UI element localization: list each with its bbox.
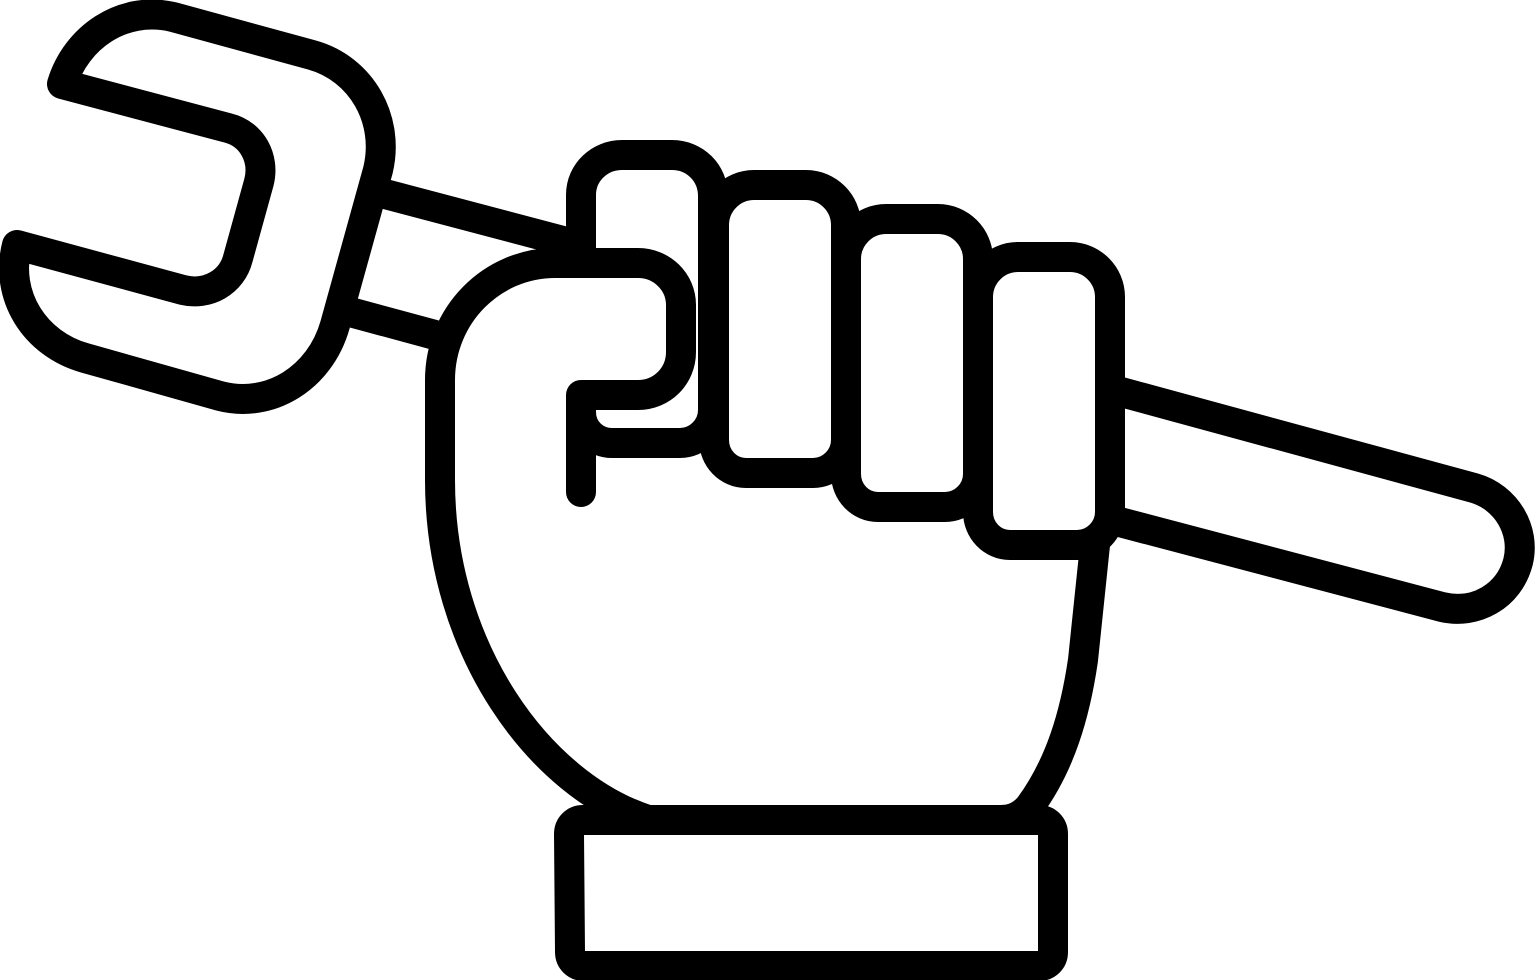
wrist cuff bbox=[569, 820, 1053, 966]
ring finger bbox=[846, 219, 978, 507]
little finger bbox=[978, 257, 1110, 545]
wrench handle left section bbox=[350, 194, 578, 335]
thumb and palm bbox=[440, 263, 681, 820]
middle finger bbox=[714, 185, 846, 473]
back of hand bbox=[648, 545, 1095, 820]
index finger bbox=[581, 155, 713, 443]
wrench handle right section bbox=[1110, 389, 1520, 609]
wrench head bbox=[14, 15, 381, 399]
